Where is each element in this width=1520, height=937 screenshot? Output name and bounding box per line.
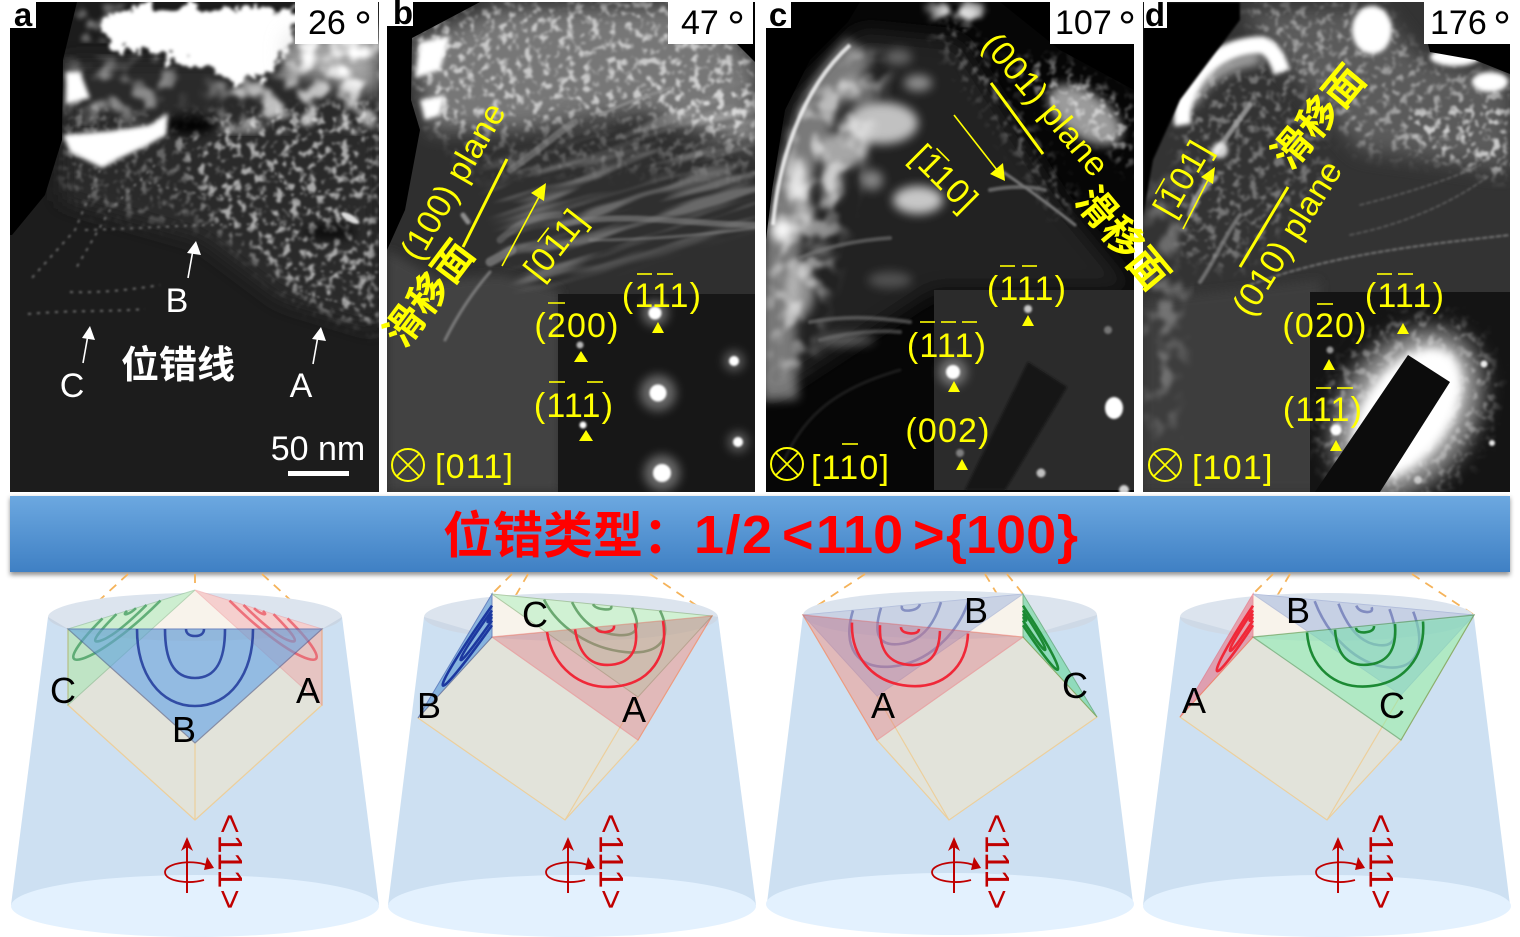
labels c: C	[1062, 665, 1088, 706]
angle label 107 degrees	[1050, 0, 1136, 52]
zone axis [011]	[392, 448, 514, 486]
banner: dislocation type: 100	[966, 505, 1056, 565]
diffraction label upper (-1-11): (111)	[622, 277, 702, 315]
rotation axis c: <111>	[978, 814, 1016, 910]
zone axis [011]: [011]	[435, 448, 514, 486]
angle label 107 degrees: 107	[1055, 4, 1112, 42]
cone body c	[767, 615, 1133, 903]
banner: dislocation type: }	[1057, 505, 1078, 565]
diffraction label (1-1-1): (111)	[1283, 391, 1363, 429]
plane A (red)	[1180, 594, 1253, 717]
cone bottom b	[388, 875, 756, 937]
plane C (green)	[53, 590, 195, 705]
crystal body d	[1180, 594, 1474, 820]
scale bar 50 nm: 50 nm	[271, 430, 365, 468]
slip plane line	[991, 83, 1043, 154]
plane B (blue)	[418, 594, 492, 718]
schematic a: cone and octahedron with slip planes	[11, 590, 379, 937]
dashed guide lines b	[492, 574, 712, 637]
rotation axis a	[165, 814, 248, 910]
cone top b	[424, 593, 718, 641]
panel c: TEM image at 107 degrees	[765, 0, 1136, 495]
angle label 176 degrees	[1424, 0, 1511, 52]
direction arrow [0-11]	[502, 183, 546, 266]
dashed guide lines a	[68, 574, 322, 629]
labels a	[50, 670, 320, 750]
dashed guide lines d	[1253, 574, 1474, 637]
ellipse overlay d	[1180, 617, 1474, 641]
plane C (green)	[492, 594, 712, 697]
rotation axis c	[932, 814, 1016, 910]
zone axis [101]	[1149, 449, 1274, 487]
labels c: A	[871, 685, 895, 726]
labels d: C	[1379, 685, 1405, 726]
slip plane caption for panel c, spanning the gap: 滑移面	[1067, 179, 1177, 299]
marker triangles	[574, 322, 664, 441]
ellipse overlay b	[424, 616, 718, 641]
plane label (001): (001) plane	[975, 26, 1116, 184]
angle label 26 degrees: °	[354, 3, 372, 52]
plane A (red)	[803, 615, 1023, 740]
direction arrow [1-10]	[954, 115, 1005, 181]
banner: dislocation type: {	[946, 505, 967, 565]
diffraction label (-1-11): (111)	[1365, 277, 1445, 315]
angle label 47 degrees	[668, 0, 753, 52]
schematic b: cone and octahedron with slip planes	[388, 593, 756, 937]
direction label [-101]: [101]	[1146, 134, 1220, 223]
labels a: C	[50, 670, 76, 711]
zone axis [1-10]	[771, 444, 890, 487]
labels d	[1182, 590, 1405, 726]
diffraction label lower (-11-1): (111)	[534, 387, 614, 425]
slip plane caption: 滑移面	[1264, 58, 1374, 178]
angle label 107 degrees: °	[1118, 3, 1136, 52]
dashed guide lines c	[803, 574, 1023, 637]
dislocation line caption: 位错线	[121, 345, 235, 387]
angle label 26 degrees: 26	[308, 4, 346, 42]
labels b: C	[522, 594, 548, 635]
cone bottom c	[766, 873, 1134, 935]
marker triangles	[1323, 323, 1409, 451]
labels c: B	[964, 590, 988, 631]
labels b	[417, 594, 646, 730]
crystal body a	[68, 590, 322, 820]
slip plane line	[1240, 187, 1288, 267]
cone top d	[1180, 593, 1474, 641]
angle label 47 degrees: °	[727, 3, 745, 52]
panel a: TEM image at 26 degrees	[10, 0, 379, 492]
schematic d: cone and octahedron with slip planes	[1143, 590, 1511, 937]
cone body d	[1143, 617, 1510, 905]
crystal body b	[418, 594, 712, 820]
cone body a	[11, 617, 379, 905]
rotation axis d	[1316, 814, 1400, 910]
plane A (red)	[195, 590, 337, 705]
diffraction label (-1-11): (111)	[987, 270, 1067, 308]
schematic c: cone and octahedron with slip planes	[766, 590, 1134, 935]
panel b: TEM image at 47 degrees	[376, 0, 791, 492]
labels d: B	[1286, 590, 1310, 631]
labels d: A	[1182, 680, 1206, 721]
crystal body c	[803, 594, 1097, 820]
panel d: TEM image at 176 degrees	[1143, 2, 1510, 492]
label C with arrow	[60, 326, 95, 405]
label A with arrow: A	[290, 367, 313, 405]
labels a: A	[296, 670, 320, 711]
plane label (010): (010) plane	[1225, 154, 1350, 323]
diffraction label (-1-1-1): (111)	[907, 327, 987, 365]
zone axis [101]: [101]	[1192, 449, 1274, 487]
zone axis [1-10]: [110]	[811, 449, 890, 487]
cone top a	[48, 593, 342, 641]
plane C (green)	[1253, 615, 1474, 740]
label B with arrow: B	[166, 282, 188, 320]
plane B (blue)	[68, 629, 322, 743]
marker triangles	[948, 315, 1034, 470]
banner: dislocation type: 1/2	[694, 505, 774, 565]
plane B (blue)	[1253, 594, 1474, 695]
label A with arrow	[290, 327, 326, 405]
cone top c	[803, 591, 1097, 639]
banner: dislocation type: >	[913, 505, 945, 565]
cone bottom a	[11, 875, 379, 937]
rotation axis d: <111>	[1362, 814, 1400, 910]
labels b: B	[417, 685, 441, 726]
rotation axis a: <111>	[210, 814, 248, 910]
diffraction label (-200): (200)	[534, 307, 620, 345]
plane A (red)	[492, 616, 712, 740]
direction label [0-11]: [011]	[516, 202, 595, 287]
labels a: B	[172, 709, 196, 750]
plane label (100): (100) plane	[393, 96, 514, 267]
rotation axis b: <111>	[592, 814, 630, 910]
angle label 26 degrees	[295, 0, 378, 52]
rotation axis b	[546, 814, 630, 910]
banner: dislocation type: 110	[816, 505, 903, 565]
banner: dislocation type: 位错类型：	[443, 508, 693, 564]
slip plane caption: 滑移面	[376, 233, 483, 355]
banner: dislocation type: <	[782, 505, 814, 565]
ellipse overlay c	[803, 615, 1097, 639]
plane B (blue)	[803, 594, 1023, 696]
diffraction label (0-20): (020)	[1282, 307, 1368, 345]
direction arrow [-101]	[1183, 167, 1215, 229]
angle label 176 degrees: °	[1493, 3, 1511, 52]
banner: dislocation type	[10, 496, 1510, 575]
cone body b	[388, 617, 756, 905]
angle label 47 degrees: 47	[681, 4, 719, 42]
cone bottom d	[1143, 875, 1511, 937]
label C with arrow: C	[60, 367, 84, 405]
plane C (green)	[1023, 594, 1097, 717]
label B with arrow	[166, 241, 201, 320]
ellipse overlay a	[48, 617, 342, 641]
diffraction label (002): (002)	[905, 412, 991, 450]
direction label [1-10]: [110]	[903, 137, 986, 220]
slip plane line	[463, 159, 507, 247]
labels b: A	[622, 689, 646, 730]
labels c	[871, 590, 1088, 726]
angle label 176 degrees: 176	[1430, 4, 1487, 42]
